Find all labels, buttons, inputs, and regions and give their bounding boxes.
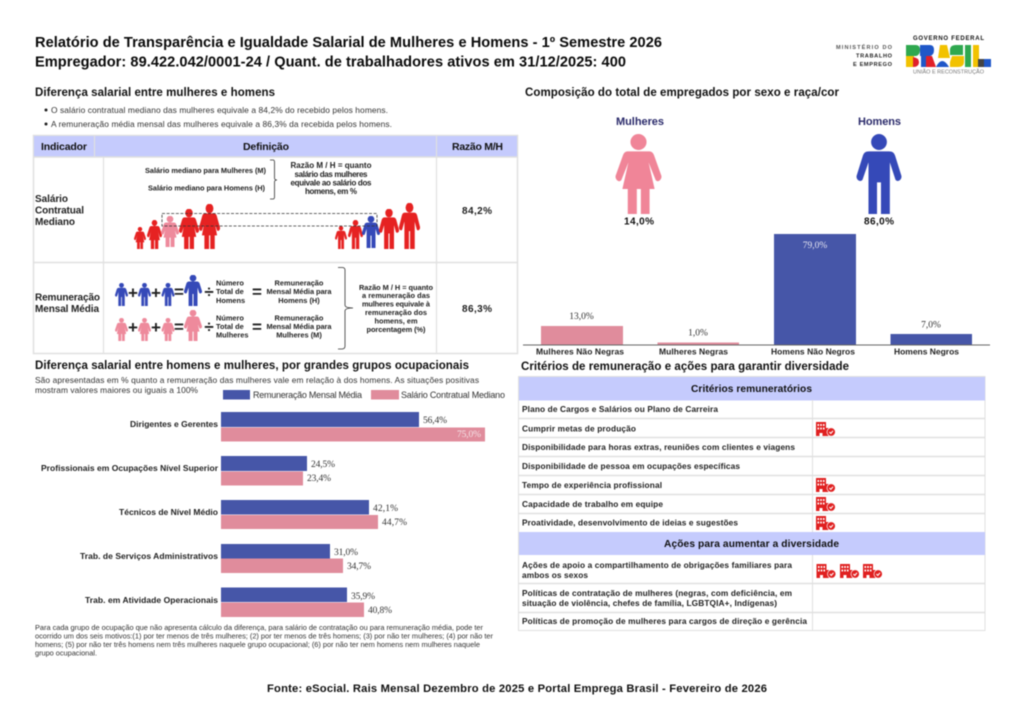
group: serviços administrativos: 31,0% <box>334 548 358 558</box>
bracket and explanation: a remuneração das <box>362 291 430 300</box>
criteria rows: Cumprir metas de produção <box>522 424 636 434</box>
group: atividade operacional: 40,8% <box>368 606 392 616</box>
heading: grandes grupos ocupacionais: Diferença salarial entre homens e mulheres, por grandes grupos ocupacionais <box>35 360 469 372</box>
definition: salário mediano text: Razão M / H = quanto <box>290 161 372 170</box>
group: dirigentes e gerentes <box>130 412 485 442</box>
dashed median box <box>162 214 377 226</box>
criteria rows: Plano de Cargos e Salários ou Plano de Carreira <box>522 404 718 414</box>
group: dirigentes e gerentes: 75,0% <box>457 430 481 440</box>
bar: homens negros: 7,0% <box>921 320 941 330</box>
logo: Ministério do Trabalho e Emprego <box>836 43 893 68</box>
footnote: grupo ocupacional. <box>35 648 97 658</box>
formula: homens: + <box>151 284 161 302</box>
group: dirigentes e gerentes: 56,4% <box>423 416 447 426</box>
formula: mulheres: Total de <box>216 322 244 331</box>
group: profissionais <box>41 456 335 486</box>
logo: Ministério do Trabalho e Emprego: TRABALHO <box>856 54 893 60</box>
footnote <box>35 623 494 658</box>
formula: mulheres: Remuneração <box>275 314 324 322</box>
action rows: Políticas de promoção de mulheres para cargos de direção e gerência <box>522 616 807 626</box>
value: 84,2%: 84,2% <box>462 206 492 217</box>
action rows <box>522 560 807 626</box>
source: Fonte: eSocial. Rais Mensal Dezembro de 2025 e Portal Emprega Brasil - Fevereiro de 2026 <box>267 683 767 695</box>
axis labels: Mulheres Negras <box>659 346 728 356</box>
logo: Governo Federal Brasil: UNIÃO E RECONSTRUÇÃO <box>913 68 985 76</box>
description: São apresentadas em % quanto a remuneração das mulheres vale em relação à dos homens. As situações positivas <box>35 375 479 385</box>
icon: homens 86,0% <box>857 116 901 228</box>
criteria rows: Proatividade, desenvolvimento de ideias e sugestões <box>522 518 738 528</box>
action rows: Ações de apoio a compartilhamento de obrigações familiares para <box>522 560 792 570</box>
formula: mulheres: Número <box>216 314 244 322</box>
row label: remuneração mensal média: Mensal Média <box>35 304 99 315</box>
icons: empresa ações de apoio <box>816 564 882 578</box>
icon: mulheres 14,0%: 14,0% <box>624 216 654 228</box>
definition: salário mediano text: homens, em % <box>305 187 357 196</box>
group: serviços administrativos: 34,7% <box>347 562 371 572</box>
icon: empresa proatividade <box>816 516 835 530</box>
axis labels <box>536 346 959 356</box>
heading: diferença salarial entre mulheres e homens: Diferença salarial entre mulheres e homens <box>35 87 275 99</box>
icon: homens 86,0%: Homens <box>858 116 901 128</box>
formula: homens: ÷ <box>204 282 214 302</box>
group: profissionais: Profissionais em Ocupações Nível Superior <box>41 463 219 473</box>
formula: mulheres: ÷ <box>204 318 214 336</box>
row label: salário contratual mediano: Salário <box>35 194 68 205</box>
icon group: mulheres em fila <box>134 204 220 249</box>
bracket and explanation: Razão M / H = quanto <box>359 283 433 292</box>
footnote: ocorrido um dos seis motivos:(1) por ter menos de três mulheres; (2) por ter menos de três homens; (3) por não ter mulheres; (4) por não ter <box>35 632 494 640</box>
definition: salário mediano text: equivale ao salário dos <box>290 178 372 188</box>
action rows: Políticas de contratação de mulheres (negras, com deficiência, em <box>522 588 792 598</box>
group: técnicos: Técnicos de Nível Médio <box>119 507 218 517</box>
bar: mulheres negras <box>658 328 739 344</box>
group: profissionais: 23,4% <box>307 474 331 484</box>
title: Relatório de Transparência e Igualdade Salarial de Mulheres e Homens - 1º Semestre 2026 <box>35 35 662 51</box>
formula: mulheres: Mulheres (M) <box>276 330 322 340</box>
criteria rows <box>522 404 795 528</box>
title <box>35 35 662 70</box>
legend: Remuneração Mensal Média <box>253 390 362 400</box>
description: mostram valores maiores ou iguais a 100% <box>35 385 199 395</box>
description <box>35 375 479 395</box>
bullet list <box>44 105 392 129</box>
heading: critérios: Critérios de remuneração e ações para garantir diversidade <box>521 361 849 373</box>
logo: Governo Federal Brasil <box>906 36 991 76</box>
bracket and explanation: mulheres equivale à <box>362 300 431 308</box>
formula: homens: Homens (H) <box>278 296 320 305</box>
formula: homens <box>115 275 332 306</box>
bracket and explanation: porcentagem (%) <box>366 325 426 334</box>
icon: mulheres 14,0%: Mulheres <box>616 116 664 128</box>
formula: mulheres: Mulheres <box>216 330 248 340</box>
icon: empresa tempo de experiência <box>816 478 835 492</box>
bullet list: O salário contratual mediano das mulheres equivale a 84,2% do recebido pelos homens. <box>51 105 388 115</box>
row label: salário contratual mediano: Contratual <box>35 206 84 216</box>
action rows: situação de violência, chefes de família, LGBTQIA+, Indígenas) <box>522 598 777 608</box>
logo: Ministério do Trabalho e Emprego: MINISTÉRIO DO <box>836 43 893 51</box>
panel: critérios e ações <box>518 376 985 631</box>
formula: homens: Mensal Média para <box>266 287 332 296</box>
bracket and explanation: homens, em <box>374 316 418 326</box>
table header: Definição <box>243 141 289 153</box>
icon: empresa trabalho em equipe <box>816 497 835 511</box>
bar: homens não negros <box>774 234 856 344</box>
group: técnicos: 42,1% <box>373 504 398 514</box>
icon: empresa cumpre metas <box>816 422 835 436</box>
group: técnicos: 44,7% <box>382 518 407 528</box>
bar: homens não negros: 79,0% <box>803 241 827 251</box>
row label: salário contratual mediano <box>35 194 84 228</box>
definition: salário mediano text <box>145 160 372 199</box>
row label: remuneração mensal média <box>35 292 100 315</box>
action rows: ambos os sexos <box>522 570 588 580</box>
icon group: homens em fila <box>335 203 420 249</box>
group: atividade operacional <box>85 588 392 617</box>
logo: Governo Federal Brasil: GOVERNO FEDERAL <box>913 36 984 42</box>
axis labels: Homens Negros <box>894 346 959 356</box>
table header: Razão M/H <box>452 141 503 153</box>
criteria rows: Disponibilidade de pessoa em ocupações específicas <box>522 461 740 471</box>
legend: Salário Contratual Mediano <box>401 390 505 400</box>
criteria rows: Capacidade de trabalho em equipe <box>522 499 663 509</box>
formula: mulheres: + <box>128 318 138 337</box>
group: dirigentes e gerentes: Dirigentes e Gerentes <box>130 419 218 429</box>
formula: mulheres: Mensal Média para <box>266 322 332 331</box>
axis labels: Mulheres Não Negras <box>536 346 624 356</box>
panel: tabela indicador definição razão <box>34 136 518 354</box>
bracket and explanation <box>338 268 433 349</box>
footnote: homens; (5) por não ter três homens nem três mulheres naquele grupo ocupacional; (6) por não ter nem homens nem mulheres naquele <box>35 640 480 649</box>
group: atividade operacional: Trab. em Atividade Operacionais <box>85 595 218 605</box>
table header: Indicador <box>41 141 87 153</box>
bullet list: A remuneração média mensal das mulheres equivale a 86,3% da recebida pelos homens. <box>51 119 392 129</box>
value: 86,3%: 86,3% <box>462 304 492 315</box>
formula: homens: Homens <box>216 296 245 305</box>
bar chart: composição por sexo e raça <box>523 234 990 356</box>
row label: salário contratual mediano: Mediano <box>35 217 75 228</box>
group: serviços administrativos <box>80 544 371 573</box>
definition: salário mediano text: Salário mediano para Homens (H) <box>148 184 266 192</box>
icon: mulheres 14,0% <box>616 116 664 228</box>
header: critérios remuneratórios <box>519 377 985 400</box>
formula: homens: Remuneração <box>275 278 324 288</box>
group: técnicos <box>119 500 407 529</box>
formula: homens: Número <box>216 278 244 288</box>
formula: homens: Total de <box>216 287 244 296</box>
table header <box>34 136 517 157</box>
title: Empregador: 89.422.042/0001-24 / Quant. de trabalhadores ativos em 31/12/2025: 400 <box>35 54 626 70</box>
definition: salário mediano text: salário das mulheres <box>294 170 368 179</box>
formula: mulheres: = <box>174 318 184 336</box>
axis labels: Homens Não Negros <box>771 346 855 356</box>
group: profissionais: 24,5% <box>311 460 335 470</box>
heading: composição: Composição do total de empregados por sexo e raça/cor <box>525 87 840 99</box>
bar: homens negros <box>890 320 972 344</box>
criteria rows: Disponibilidade para horas extras, reuniões com clientes e viagens <box>522 442 795 452</box>
bar: mulheres negras: 1,0% <box>688 328 708 338</box>
definition: salário mediano text: Salário mediano para Mulheres (M) <box>145 166 267 175</box>
footnote: Para cada grupo de ocupação que não apresenta cálculo da diferença, para salário de contratação ou para remuneração média, pode ter <box>35 623 484 632</box>
bracket and explanation: remuneração dos <box>365 308 427 317</box>
bar: mulheres não negras <box>541 312 623 344</box>
icon: homens 86,0%: 86,0% <box>864 216 894 228</box>
formula: mulheres: = <box>252 318 262 336</box>
group: serviços administrativos: Trab. de Serviços Administrativos <box>80 551 218 561</box>
header: critérios remuneratórios: Critérios remuneratórios <box>691 384 812 395</box>
group: atividade operacional: 35,9% <box>351 592 375 602</box>
header: ações para aumentar a diversidade: Ações para aumentar a diversidade <box>664 539 839 550</box>
bar: mulheres não negras: 13,0% <box>569 312 594 322</box>
bar chart: grupos ocupacionais <box>41 412 485 617</box>
header: ações para aumentar a diversidade <box>519 532 985 555</box>
formula: mulheres <box>115 310 332 341</box>
formula: homens: + <box>128 284 138 302</box>
logo: Ministério do Trabalho e Emprego: E EMPREGO <box>853 62 893 68</box>
criteria rows: Tempo de experiência profissional <box>522 480 662 490</box>
formula: homens: = <box>252 282 262 302</box>
legend <box>223 390 505 400</box>
formula: homens: = <box>174 282 184 302</box>
row label: remuneração mensal média: Remuneração <box>35 292 100 304</box>
formula: mulheres: + <box>151 318 161 337</box>
